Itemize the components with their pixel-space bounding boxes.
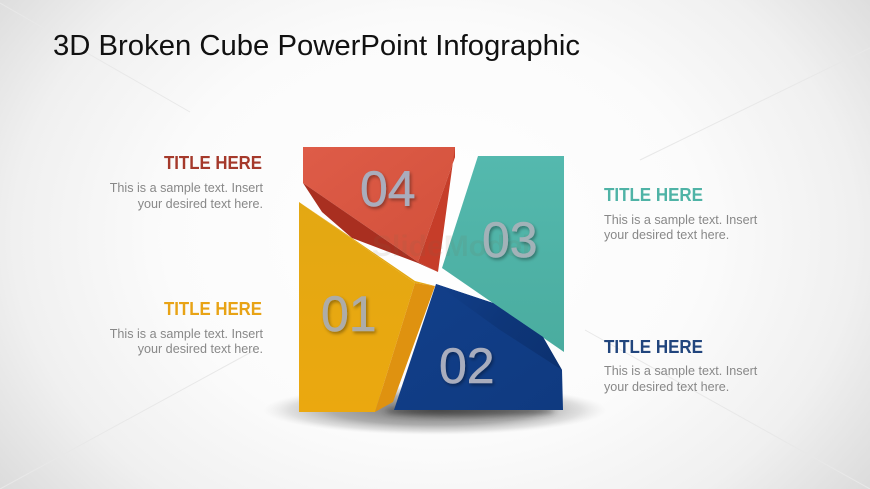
callout: yellow title 01: your desired text here. (138, 342, 263, 356)
callout: yellow title 01 (110, 299, 263, 356)
callout: yellow title 01: TITLE HERE (164, 299, 262, 319)
callout: blue title 02: your desired text here. (604, 380, 729, 394)
callout: red title 04: TITLE HERE (164, 153, 262, 173)
callout: blue title 02: This is a sample text. Insert (604, 364, 758, 378)
callout: teal title 03: TITLE HERE (604, 185, 703, 205)
cube piece 04: red (303, 147, 455, 272)
cube piece 02: blue (394, 284, 563, 410)
number 02: 02 (439, 338, 495, 394)
callout: teal title 03: This is a sample text. Insert (604, 213, 758, 227)
callout: teal title 03 (604, 185, 758, 242)
callout: blue title 02 (604, 337, 758, 394)
title: 3D Broken Cube PowerPoint Infographic (53, 30, 580, 62)
callout: red title 04: This is a sample text. Insert (110, 181, 263, 195)
callout: red title 04: your desired text here. (138, 197, 263, 211)
cube piece 03: teal (442, 156, 564, 352)
cube floor shadow (263, 385, 607, 435)
callout: red title 04 (110, 153, 263, 211)
number 03: 03 (482, 212, 538, 268)
number 01: 01 (321, 286, 377, 342)
cube piece 01: yellow (299, 202, 435, 412)
callout: blue title 02: TITLE HERE (604, 337, 703, 357)
number 04: 04 (360, 161, 416, 217)
callout: yellow title 01: This is a sample text. Insert (110, 327, 263, 341)
callout: teal title 03: your desired text here. (604, 228, 729, 242)
watermark: SlideModel (372, 230, 530, 263)
